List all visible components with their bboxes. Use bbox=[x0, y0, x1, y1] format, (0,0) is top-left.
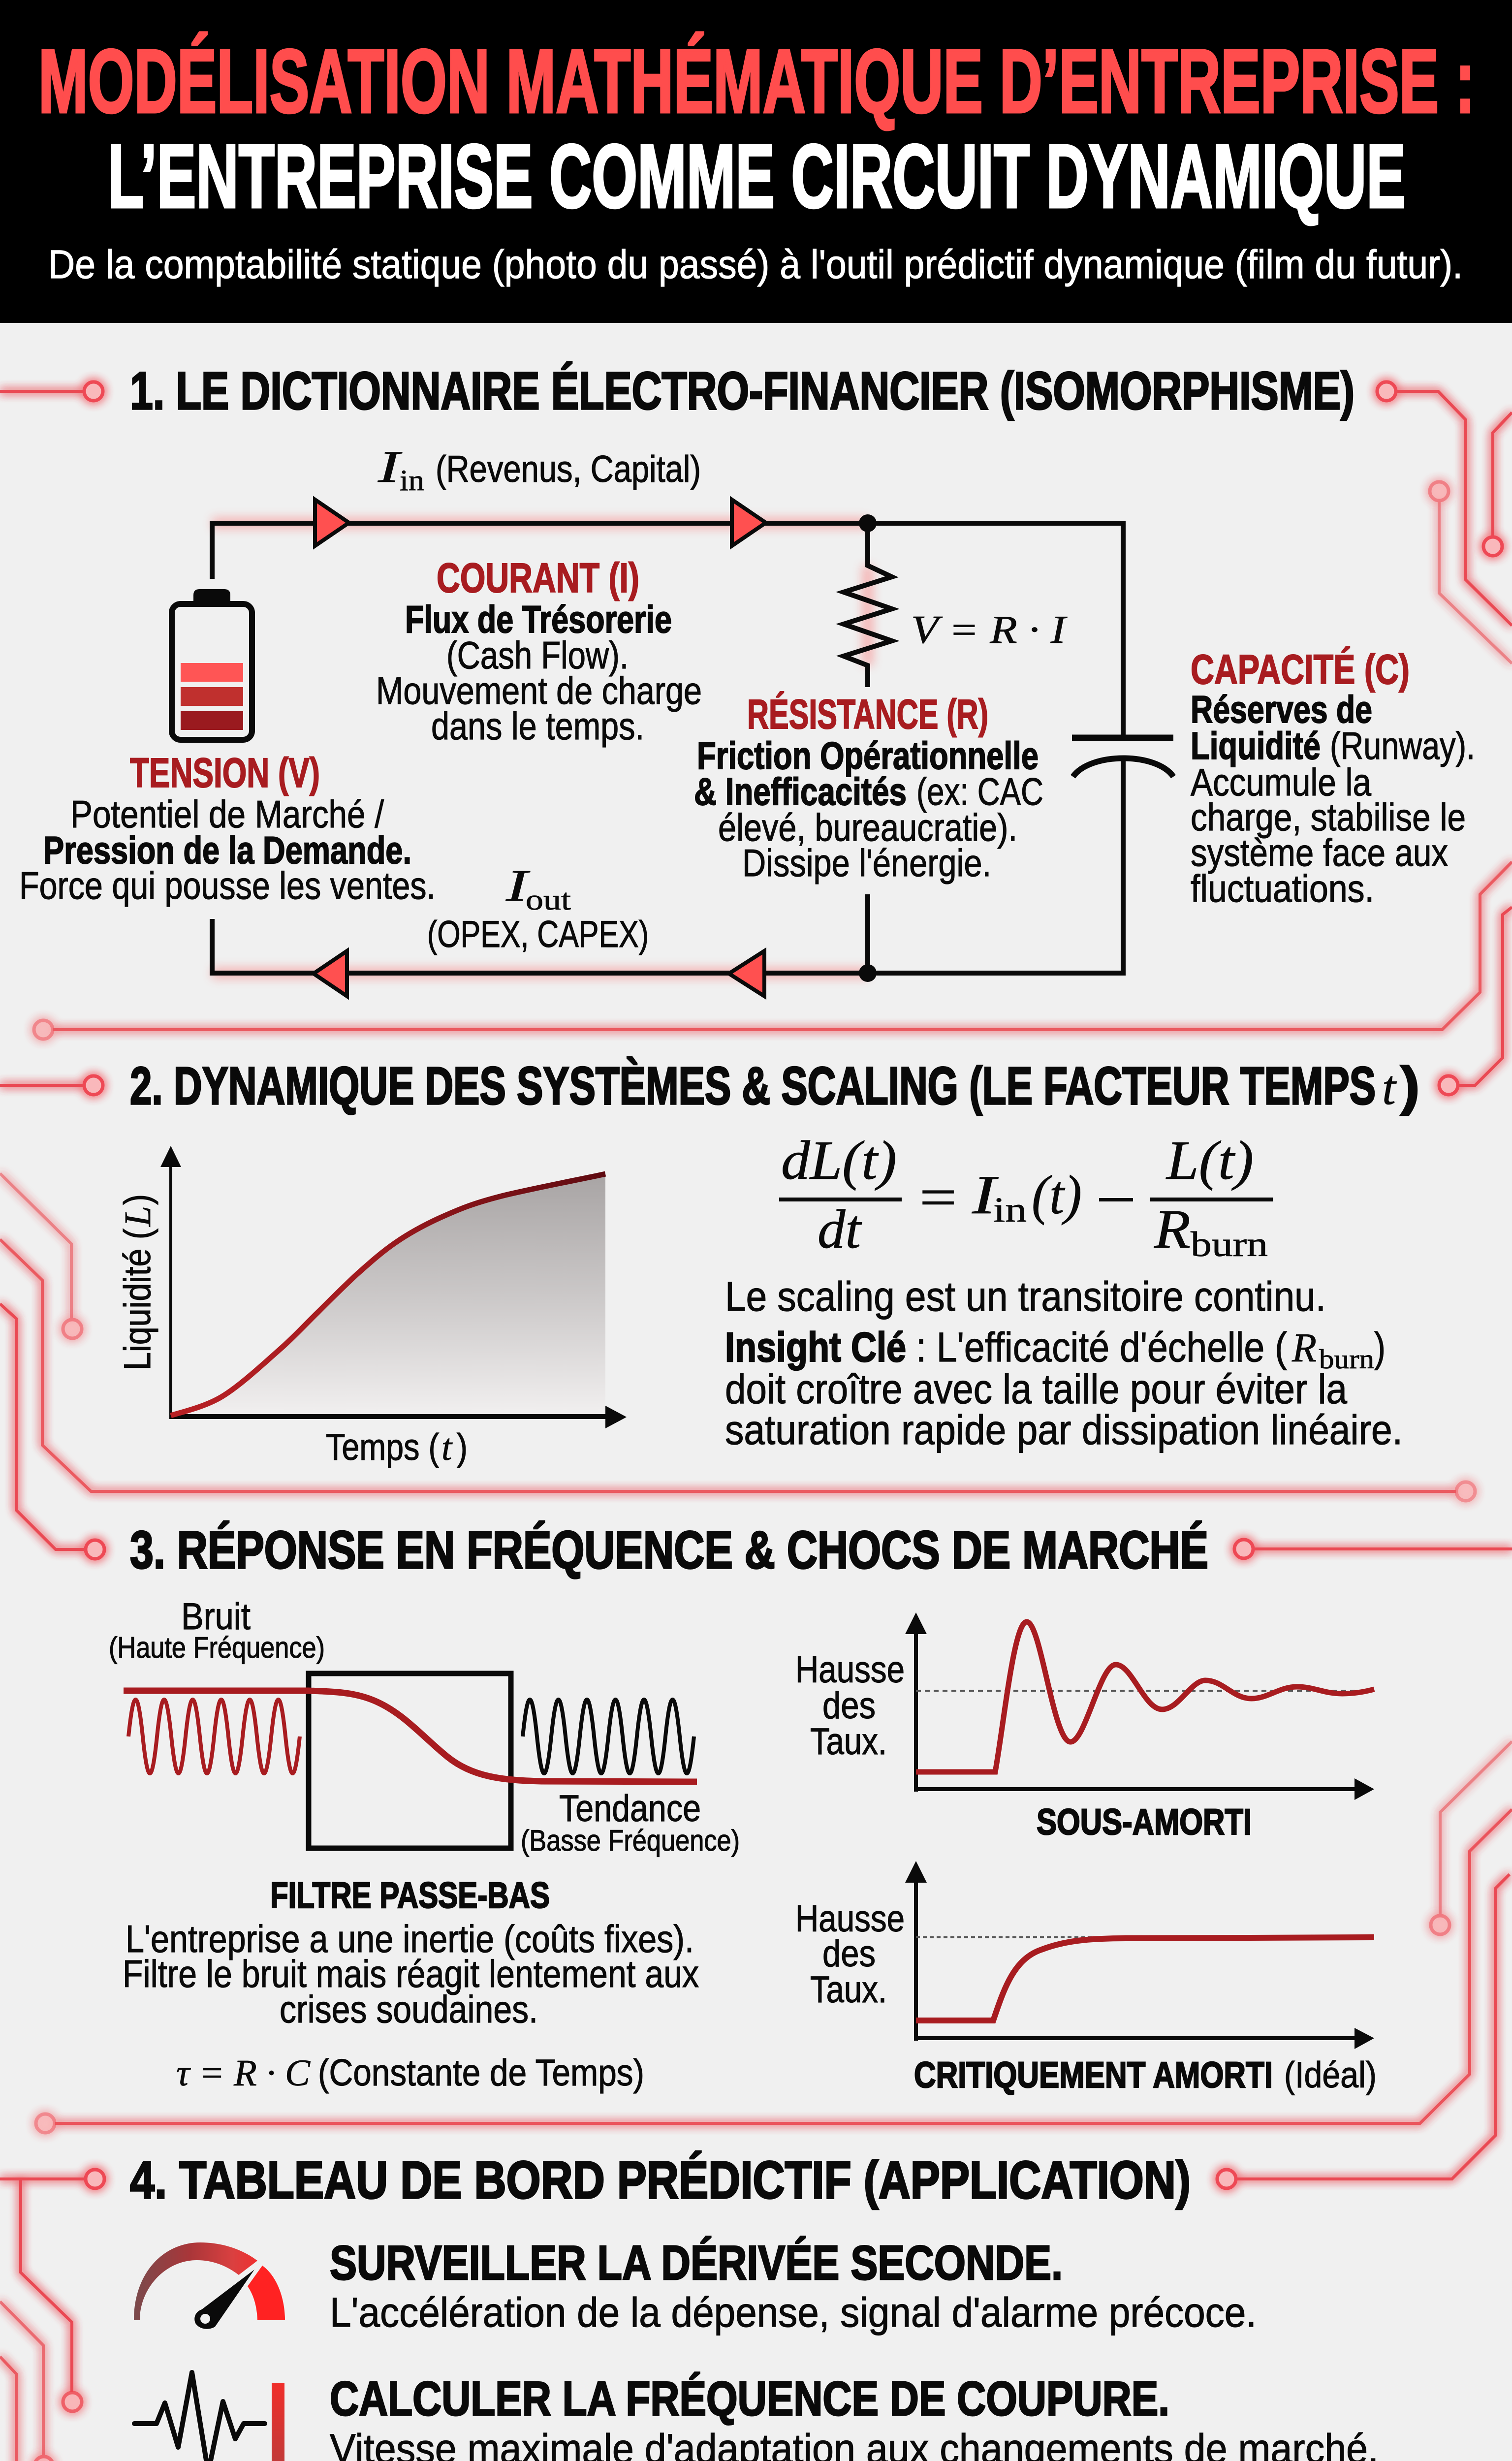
diagram: low-pass filter bbox=[109, 1596, 740, 2094]
y label: des bbox=[822, 1685, 876, 1727]
trace: right lower light branch bbox=[1431, 1741, 1512, 1934]
circuit wires bbox=[212, 523, 1123, 973]
trace: right upper branch bbox=[1483, 412, 1512, 556]
trace: left lower branch bbox=[0, 2302, 53, 2461]
x label: t bbox=[441, 1427, 453, 1468]
setpoint bbox=[916, 1690, 1374, 1692]
y label: Taux. bbox=[810, 1969, 887, 2011]
item 1 text: L'accélération de la dépense, signal d'alarme précoce. bbox=[330, 2289, 1257, 2335]
y label: ) bbox=[117, 1194, 158, 1205]
label: capacité: CAPACITÉ (C) bbox=[1191, 646, 1410, 693]
trace: section 4 left bbox=[0, 2170, 104, 2411]
y label: Hausse bbox=[795, 1898, 905, 1940]
junction bottom bbox=[859, 964, 877, 982]
label: capacité: charge, stabilise le bbox=[1191, 795, 1466, 839]
noise wave bbox=[128, 1700, 300, 1773]
junction top bbox=[859, 514, 877, 532]
label: I out: I bbox=[505, 860, 531, 911]
label: tension: Force qui pousse les ventes. bbox=[19, 864, 436, 907]
x label: ) bbox=[457, 1426, 468, 1468]
x axis bbox=[169, 1414, 608, 1419]
trace: under section 3 bbox=[36, 1809, 1512, 2133]
formula: dL/dt bbox=[779, 1130, 1273, 1264]
area under curve bbox=[171, 1174, 605, 1417]
text block: insight: Le scaling est un transitoire continu. bbox=[725, 1273, 1326, 1320]
filter text: L'entreprise a une inertie (coûts fixes). bbox=[126, 1917, 694, 1960]
trace: section 4 right bbox=[1217, 1874, 1510, 2188]
item 2 text bbox=[330, 2371, 1379, 2461]
label: trend bbox=[521, 1788, 740, 1857]
y label: des bbox=[822, 1933, 876, 1975]
y label bbox=[795, 1649, 905, 1763]
capacitor bbox=[1072, 738, 1173, 777]
axes bbox=[914, 1629, 1358, 1792]
item 2 text: CALCULER LA FRÉQUENCE DE COUPURE. bbox=[330, 2371, 1169, 2426]
label: résistance: Friction Opérationnelle bbox=[697, 734, 1039, 777]
label: tension: Potentiel de Marché / bbox=[70, 792, 384, 836]
filter text bbox=[123, 1917, 699, 2031]
label: résistance: Dissipe l'énergie. bbox=[742, 841, 991, 884]
setpoint bbox=[916, 1936, 1112, 1938]
filter text: Filtre le bruit mais réagit lentement aux bbox=[123, 1952, 699, 1995]
label: courant: Mouvement de charge bbox=[376, 669, 702, 712]
trace: section 1 right bbox=[1377, 382, 1512, 626]
y label: Hausse bbox=[795, 1649, 905, 1691]
icon: gauge bbox=[134, 2242, 285, 2329]
formula: tau bbox=[176, 2052, 644, 2094]
caption: SOUS-AMORTI bbox=[1037, 1801, 1252, 1842]
arrow 2 bbox=[732, 500, 766, 546]
text block: insight: doit croître avec la taille pour éviter la bbox=[725, 1366, 1347, 1412]
label: capacité: Réserves de bbox=[1191, 688, 1372, 731]
heading: section 3: 3. RÉPONSE EN FRÉQUENCE & CHOCS DE MARCHÉ bbox=[130, 1520, 1208, 1579]
label: résistance: élevé, bureaucratie). bbox=[718, 806, 1017, 849]
arrow 4 bbox=[729, 951, 764, 996]
formula: dL/dt: dt bbox=[818, 1199, 862, 1260]
y label: L bbox=[117, 1206, 158, 1227]
caption: (Idéal) bbox=[1284, 2054, 1377, 2095]
formula: dL/dt: dL(t) bbox=[781, 1130, 897, 1191]
formula: dL/dt: I bbox=[972, 1165, 999, 1226]
heading: section 2: t bbox=[1382, 1060, 1397, 1115]
trace: section 2 left bbox=[0, 1076, 103, 1095]
trace: section 3 right bbox=[1234, 1540, 1512, 1558]
text block: insight bbox=[725, 1273, 1403, 1453]
arrow 3 bbox=[314, 951, 347, 996]
item 1 text bbox=[330, 2236, 1257, 2335]
label: capacité: Accumule la bbox=[1191, 760, 1372, 804]
label: courant: (Cash Flow). bbox=[446, 633, 629, 677]
label: I in: I bbox=[378, 442, 403, 492]
heading: section 4: 4. TABLEAU DE BORD PRÉDICTIF (APPLICATION) bbox=[130, 2150, 1191, 2209]
y label bbox=[795, 1898, 905, 2011]
label: capacité: (Runway). bbox=[1330, 724, 1475, 767]
oscillating curve bbox=[916, 1622, 1374, 1772]
formula: dL/dt: = bbox=[919, 1167, 957, 1228]
filter title: FILTRE PASSE-BAS bbox=[270, 1875, 550, 1916]
label: I in: in bbox=[400, 464, 424, 497]
label: tension: Pression de la Demande. bbox=[43, 828, 411, 872]
y arrow bbox=[160, 1146, 181, 1167]
label: I out: out bbox=[526, 883, 571, 916]
header band bbox=[0, 0, 1512, 323]
trace: under section 2 bbox=[0, 1239, 1475, 1501]
icon: pulse bbox=[134, 2372, 284, 2461]
trace: right light branch bbox=[1430, 482, 1512, 663]
y axis bbox=[169, 1162, 172, 1418]
label: courant: Flux de Trésorerie bbox=[405, 598, 672, 641]
label: capacité bbox=[1191, 646, 1475, 910]
formula: dL/dt: (t) bbox=[1032, 1165, 1082, 1226]
wire glow bbox=[212, 523, 868, 973]
label: courant: COURANT (I) bbox=[437, 555, 639, 601]
text block: insight: ) bbox=[1374, 1324, 1386, 1370]
formula: tau: (Constante de Temps) bbox=[318, 2052, 644, 2094]
label: capacité: système face aux bbox=[1191, 831, 1448, 874]
arrowheads bbox=[905, 1861, 1374, 2049]
label: trend: (Basse Fréquence) bbox=[521, 1824, 740, 1857]
text block: insight: Insight Clé bbox=[725, 1324, 906, 1370]
caption: CRITIQUEMENT AMORTI bbox=[914, 2054, 1273, 2095]
x label: Temps ( bbox=[326, 1426, 439, 1468]
text block: insight: : L'efficacité d'échelle ( bbox=[916, 1324, 1287, 1370]
label: résistance: (ex: CAC bbox=[916, 770, 1043, 813]
curve bbox=[171, 1174, 605, 1416]
axes bbox=[914, 1878, 1358, 2041]
label: I out bbox=[427, 860, 649, 955]
circuit diagram bbox=[19, 442, 1475, 996]
label: noise: (Haute Fréquence) bbox=[109, 1631, 325, 1664]
label: résistance: & Inefficacités bbox=[694, 770, 907, 813]
label: courant bbox=[376, 555, 702, 748]
chart: under-damped bbox=[795, 1612, 1374, 1842]
trace: left lightest branch bbox=[0, 1173, 82, 1338]
formula: dL/dt: burn bbox=[1191, 1225, 1268, 1264]
filter box bbox=[309, 1673, 511, 1848]
chart: critically damped bbox=[795, 1861, 1377, 2095]
text block: insight: burn bbox=[1319, 1344, 1374, 1375]
label: tension bbox=[19, 750, 436, 907]
trace: section 1 left bbox=[0, 382, 103, 401]
arrow 1 bbox=[315, 500, 349, 546]
icon: battery bbox=[172, 589, 252, 740]
label: courant: dans le temps. bbox=[431, 704, 644, 748]
x arrow bbox=[605, 1406, 627, 1428]
formula: dL/dt: R bbox=[1154, 1199, 1191, 1260]
filter text: crises soudaines. bbox=[280, 1988, 538, 2031]
y label: Taux. bbox=[810, 1721, 887, 1763]
y label: Liquidité ( bbox=[117, 1229, 158, 1370]
trace: section 3 left bbox=[0, 1304, 104, 1559]
label: capacité: Liquidité bbox=[1191, 724, 1321, 767]
formula: dL/dt: in bbox=[993, 1190, 1027, 1230]
trace: under section 1 bbox=[34, 862, 1512, 1039]
label: capacité: fluctuations. bbox=[1191, 867, 1374, 910]
label: noise bbox=[109, 1596, 325, 1664]
text block: insight: R bbox=[1292, 1325, 1317, 1371]
trace: left long branch bbox=[0, 2357, 16, 2461]
label: I out: (OPEX, CAPEX) bbox=[427, 914, 649, 955]
arrowheads bbox=[905, 1612, 1374, 1800]
label: I in bbox=[378, 442, 701, 497]
formula: tau: τ = R · C bbox=[176, 2052, 311, 2094]
label: tension: TENSION (V) bbox=[130, 750, 320, 796]
rising curve bbox=[916, 1937, 1374, 2020]
label: résistance: RÉSISTANCE (R) bbox=[747, 691, 988, 737]
text block: insight: saturation rapide par dissipation linéaire. bbox=[725, 1407, 1403, 1453]
item 1 text: SURVEILLER LA DÉRIVÉE SECONDE. bbox=[330, 2236, 1063, 2290]
label: noise: Bruit bbox=[181, 1596, 251, 1638]
response curve bbox=[124, 1691, 697, 1782]
label: résistance bbox=[694, 691, 1043, 884]
label: trend: Tendance bbox=[559, 1788, 701, 1830]
filtered wave bbox=[523, 1700, 694, 1773]
formula: V = R I: V = R · I bbox=[911, 608, 1068, 652]
label: I in: (Revenus, Capital) bbox=[436, 448, 701, 490]
trace: section 2 right bbox=[1439, 907, 1512, 1095]
chart: liquidity curve bbox=[117, 1146, 627, 1468]
heading: section 2: ) bbox=[1401, 1056, 1419, 1115]
formula: dL/dt: L(t) bbox=[1166, 1130, 1254, 1191]
